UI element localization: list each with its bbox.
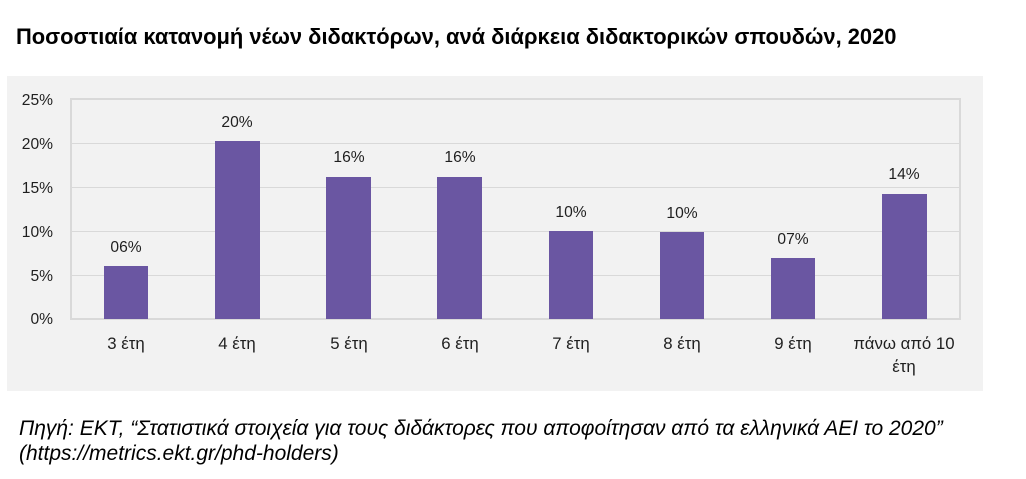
data labels: 10% — [666, 205, 698, 222]
y axis labels: 5% — [30, 268, 53, 285]
panel background — [7, 76, 983, 391]
source note: (https://metrics.ekt.gr/phd-holders) — [19, 442, 339, 465]
source note — [19, 417, 944, 465]
x axis labels: έτη — [892, 357, 916, 376]
x axis labels: 4 έτη — [218, 334, 256, 353]
source note: Πηγή: ΕΚΤ, “Στατιστικά στοιχεία για τους διδάκτορες που αποφοίτησαν από τα ελληνικά ΑΕΙ το 2020” — [19, 417, 943, 440]
data labels: 07% — [777, 231, 809, 248]
data labels: 10% — [555, 204, 587, 221]
y axis labels: 10% — [22, 224, 53, 241]
data labels: 20% — [221, 114, 253, 131]
x axis labels: 8 έτη — [663, 334, 701, 353]
x axis labels: 9 έτη — [774, 334, 812, 353]
x axis labels: 7 έτη — [552, 334, 590, 353]
data labels: 16% — [333, 149, 365, 166]
data labels: 06% — [110, 239, 142, 256]
x axis labels: 6 έτη — [441, 334, 479, 353]
y axis labels: 20% — [22, 136, 53, 153]
data labels: 14% — [888, 166, 920, 183]
gridlines — [71, 144, 960, 276]
bars — [104, 141, 927, 319]
title: Ποσοστιαία κατανομή νέων διδακτόρων, ανά διάρκεια διδακτορικών σπουδών, 2020 — [16, 24, 896, 49]
data labels: 16% — [444, 149, 476, 166]
plot frame — [71, 99, 960, 319]
y axis labels: 0% — [30, 311, 53, 328]
x axis labels: πάνω από 10 — [853, 334, 955, 353]
y axis labels: 25% — [22, 92, 53, 109]
y axis labels: 15% — [22, 180, 53, 197]
x axis labels — [107, 334, 955, 376]
y axis labels — [22, 92, 53, 328]
x axis labels: 5 έτη — [330, 334, 368, 353]
x axis labels: 3 έτη — [107, 334, 145, 353]
data labels — [110, 114, 920, 256]
